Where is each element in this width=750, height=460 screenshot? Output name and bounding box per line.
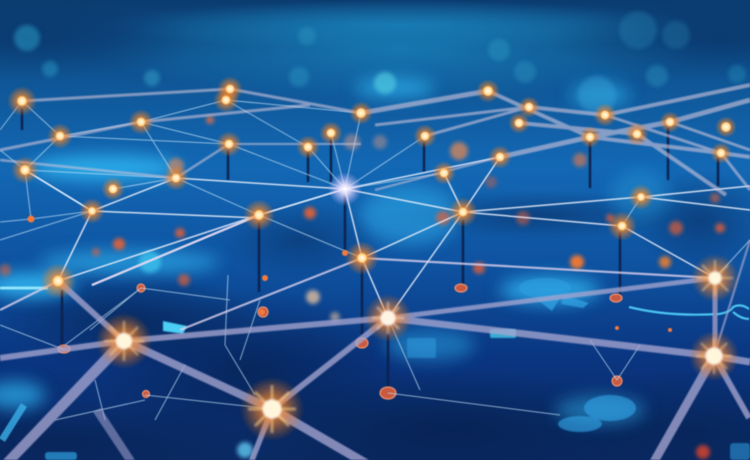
large star node centre bbox=[364, 294, 412, 342]
large star node left bbox=[96, 313, 152, 369]
small node halos bbox=[7, 76, 737, 299]
network: bright white connections bbox=[25, 157, 750, 318]
network: thick foreground beams bbox=[0, 240, 750, 460]
vertical pins below nodes bbox=[22, 108, 718, 392]
network: upper translucent beams bbox=[0, 85, 750, 195]
small orange dots bbox=[28, 216, 672, 332]
large star node bottom bbox=[240, 377, 304, 441]
central violet-white node bbox=[328, 172, 362, 206]
large node right upper bbox=[691, 254, 739, 302]
cyan glyph shapes in background bbox=[45, 278, 750, 460]
network: thin connections bbox=[0, 100, 750, 420]
cyan curving light streak bbox=[0, 288, 749, 440]
glowing network nodes bbox=[7, 76, 739, 441]
pin base rings bbox=[58, 284, 622, 399]
large node right lower bbox=[689, 331, 739, 381]
blurred cyan light patches bbox=[0, 78, 670, 424]
network: medium connections bbox=[0, 215, 715, 330]
small node cores bbox=[17, 84, 731, 286]
